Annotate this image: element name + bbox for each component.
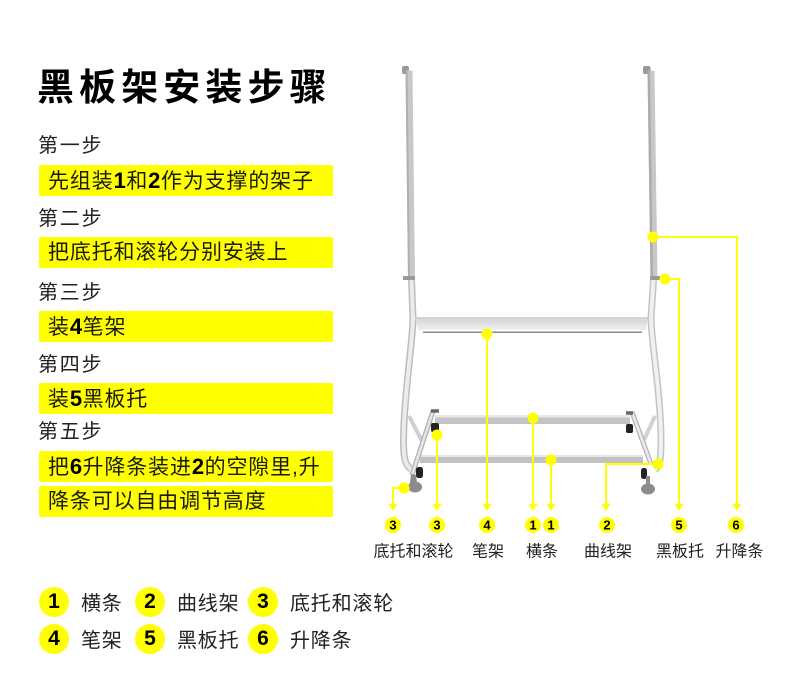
right lifting pole [643,66,662,280]
right curved frame [651,280,661,470]
diagram number badges: 3 [389,518,397,532]
diagram number badges: 1 [529,518,537,532]
legend: 4 pen tray: 4 [48,627,60,650]
back crossbar [435,415,630,424]
base rail caps [431,411,633,413]
diagram number badges: 2 [603,518,611,532]
callout: 1 front crossbar [546,454,556,511]
step 2 instruction [39,237,333,268]
diagram number badges: 4 [483,518,491,532]
legend: 5 board holder: 黑板托 [177,630,239,652]
right brace [644,416,655,440]
right base rail [632,412,651,464]
legend: 2 curved frame [135,587,239,617]
title: 黑板架安装步骤 [37,67,332,108]
diagram part labels: 升降条 [715,542,764,560]
legend: 4 pen tray: 笔架 [81,630,123,652]
step 4 heading: 第四步 [38,354,103,376]
left curved frame [404,280,413,469]
step 5 instruction line 2: 降条可以自由调节高度 [48,490,266,513]
callout: 4 pen tray [482,328,492,511]
diagram part labels: 黑板托 [656,542,704,560]
legend: 5 board holder: 5 [144,627,156,650]
step 5 instruction line 1: 把6升降条装进2的空隙里,升 [48,454,321,479]
diagram number badges: 5 [675,518,683,532]
legend: 1 crossbar: 1 [48,590,60,613]
left base rail [412,411,433,475]
legend: 6 lifting bar [248,624,352,654]
diagram number badges: 6 [732,518,740,532]
callout: 2 curved frame [602,458,664,511]
legend: 5 board holder [135,624,239,654]
step 1 heading: 第一步 [38,135,103,157]
legend: 2 curved frame: 2 [144,590,156,613]
feet [408,474,655,494]
wheels [416,423,647,479]
diagram part labels: 曲线架 [584,542,632,560]
legend: 6 lifting bar: 6 [257,627,269,650]
legend: 3 base and wheels [248,587,394,617]
diagram part labels: 笔架 [472,542,504,560]
diagram number badges [385,517,744,533]
diagram part labels: 底托和滚轮 [373,542,454,560]
diagram part labels: 横条 [526,542,558,560]
step 1 instruction: 先组装1和2作为支撑的架子 [48,168,314,193]
callout: 3 base [388,482,410,511]
step 5 instruction line 2 [39,486,333,517]
legend: 1 crossbar: 横条 [81,593,123,615]
step 2 heading: 第二步 [38,208,103,230]
callout: 5 board holder [660,274,684,511]
callout: 6 lifting bar [648,232,742,511]
legend: 6 lifting bar: 升降条 [290,630,352,652]
legend: 1 crossbar [39,587,123,617]
step 5 heading: 第五步 [38,421,103,443]
diagram number badges: 1 [547,518,555,532]
step 4 instruction: 装5黑板托 [48,386,148,411]
front crossbar [420,455,643,463]
callout: 3 wheel [432,430,442,511]
step 3 instruction [39,311,333,342]
diagram number badges: 3 [433,518,441,532]
diagram part labels [373,542,764,560]
legend: 4 pen tray [39,624,123,654]
step 2 instruction: 把底托和滚轮分别安装上 [48,241,288,264]
legend: 3 base and wheels: 3 [257,590,269,613]
step 4 instruction [39,383,333,414]
stand frame [402,66,662,494]
step 3 instruction: 装4笔架 [48,314,126,339]
step 3 heading: 第三步 [38,282,103,304]
pen tray [415,317,648,333]
legend: 2 curved frame: 曲线架 [177,593,239,615]
left lifting pole [402,66,415,280]
callout: 1 back crossbar [528,412,538,511]
legend: 3 base and wheels: 底托和滚轮 [290,593,394,615]
left brace [409,416,422,441]
